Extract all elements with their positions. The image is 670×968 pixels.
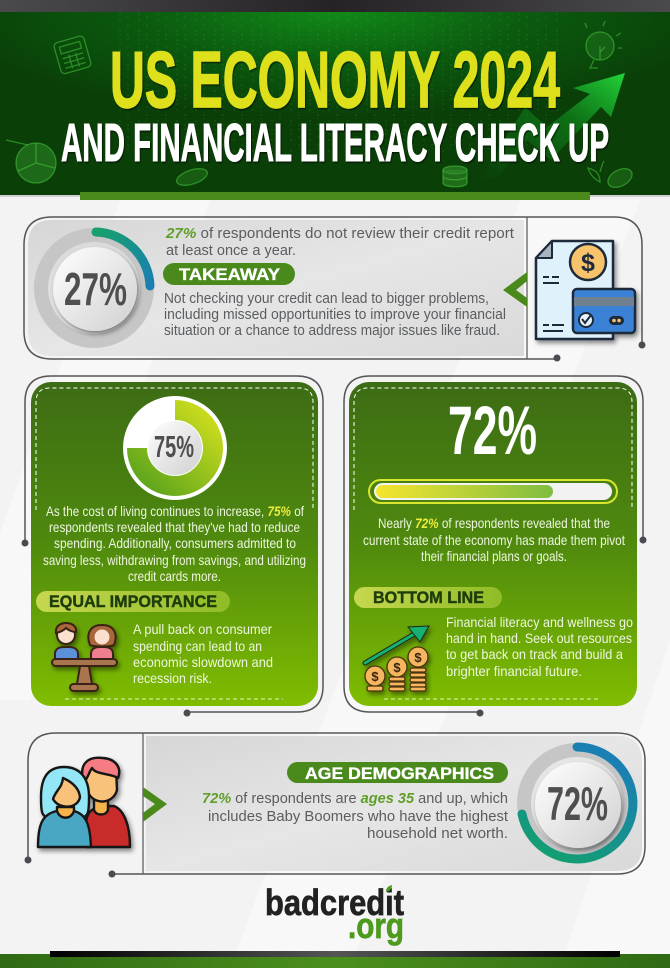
arrow chevron <box>503 272 527 307</box>
icon: credit report and card: $ <box>581 249 595 277</box>
gauge 27%: 27% <box>64 263 127 315</box>
pill: takeaway: TAKEAWAY <box>179 265 281 284</box>
text: spending finding <box>43 503 306 584</box>
icon: couple <box>38 758 130 847</box>
text: spending finding: spending. Additionally, consumers admitted to <box>54 535 296 551</box>
logo: badcredit.org <box>265 882 404 946</box>
pill: takeaway <box>163 263 295 285</box>
icon: rising coins <box>365 626 429 691</box>
text: age finding: household net worth. <box>367 825 508 842</box>
text: spending finding: As the cost of living continues to increase, 75% of <box>46 503 304 519</box>
icon: rising coins: $ <box>371 669 379 684</box>
text: finding: 27% of respondents do not review their credit report <box>165 225 515 242</box>
icon: rising coins: $ <box>393 660 401 675</box>
footer bar <box>0 951 670 968</box>
header banner <box>0 0 670 200</box>
text: pivot finding: Nearly 72% of respondents revealed that the <box>378 515 610 531</box>
text: equal importance: spending can lead to an <box>133 638 262 654</box>
text: spending finding: respondents revealed that they've had to reduce <box>49 519 300 535</box>
pill: age demographics: AGE DEMOGRAPHICS <box>305 764 494 783</box>
text: finding <box>165 225 515 259</box>
text: takeaway: including missed opportunities to improve your financial <box>164 306 506 323</box>
progress bar 72% <box>369 480 617 503</box>
text: equal importance: economic slowdown and <box>133 654 273 670</box>
text: bottom line: Financial literacy and wellness go <box>446 614 633 630</box>
panel: 72% pivoted plans <box>344 376 646 716</box>
text: takeaway: Not checking your credit can lead to bigger problems, <box>164 290 489 307</box>
text: age finding: includes Baby Boomers who have the highest <box>208 808 509 825</box>
icon: credit report and card <box>536 241 635 339</box>
panel: 75% reduced spending <box>22 376 323 716</box>
text: pivot finding <box>363 515 625 564</box>
text: finding: at least once a year. <box>166 242 296 259</box>
text: bottom line: to get back on track and build a <box>446 646 623 662</box>
panel: age demographics <box>24 733 645 878</box>
gauge 27% <box>41 232 150 341</box>
text: equal importance: recession risk. <box>133 670 212 686</box>
big number 72%: 72% <box>448 392 537 469</box>
text: age finding: 72% of respondents are ages 35 and up, which <box>202 790 508 807</box>
icon: people on a balance <box>52 623 117 691</box>
pill: equal importance: EQUAL IMPORTANCE <box>49 592 217 611</box>
text: takeaway <box>164 290 506 339</box>
text: spending finding: saving less, withdrawing from savings, and utilizing <box>43 552 306 568</box>
gauge 72%: 72% <box>547 777 608 830</box>
text: takeaway: situation or a chance to address major issues like fraud. <box>164 322 500 339</box>
arrow chevron <box>143 787 167 822</box>
donut chart 75% <box>123 396 227 500</box>
text: pivot finding: current state of the economy has made them pivot <box>363 532 625 548</box>
text: pivot finding: their financial plans or goals. <box>421 548 567 564</box>
logo: badcredit.org: .org <box>348 905 404 946</box>
icons: faint finance doodles <box>6 21 635 191</box>
growth arrow <box>480 73 625 178</box>
text: age finding <box>202 790 509 842</box>
donut chart 75%: 75% <box>154 429 194 464</box>
gauge 72% <box>522 747 633 859</box>
text: bottom line: brighter financial future. <box>446 663 582 679</box>
text: spending finding: credit cards more. <box>128 568 221 584</box>
text: bottom line <box>446 614 633 679</box>
text: equal importance: A pull back on consumer <box>133 621 272 637</box>
text: equal importance <box>133 621 273 686</box>
title <box>61 35 609 173</box>
text: bottom line: hand in hand. Seek out resources <box>446 630 632 646</box>
pill: bottom line: BOTTOM LINE <box>373 588 484 607</box>
logo: badcredit.org: badcredit <box>265 882 404 923</box>
icon: rising coins: $ <box>414 650 422 665</box>
panel: credit report 27% <box>24 217 646 362</box>
